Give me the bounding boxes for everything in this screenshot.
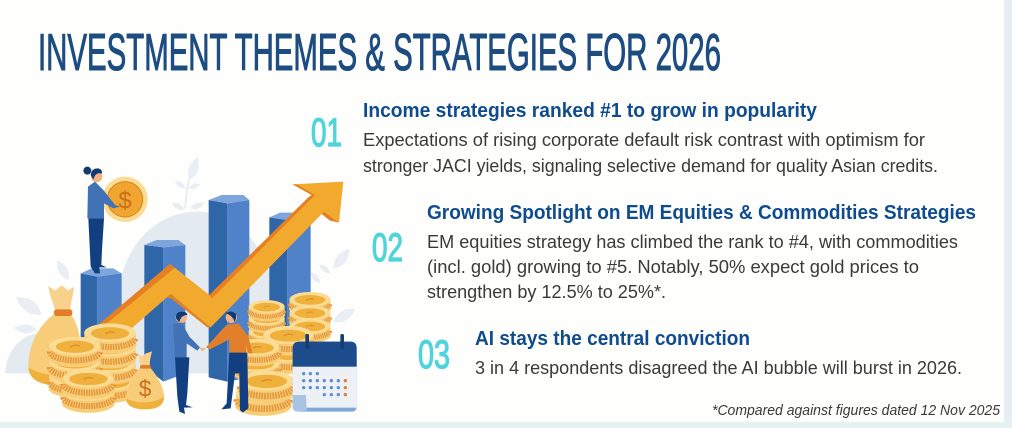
number 03: 03 [418, 333, 450, 377]
body 02 [427, 232, 958, 302]
heading 02: Growing Spotlight on EM Equities & Commodities Strategies [427, 202, 976, 224]
right coin stacks [234, 292, 330, 415]
woman holding coin [83, 167, 148, 273]
body 02: strengthen by 12.5% to 25%*. [427, 282, 666, 302]
body 01 [363, 130, 938, 176]
bar 4 [269, 213, 311, 330]
body 01: Expectations of rising corporate default risk contrast with optimism for [363, 130, 925, 150]
large money bag [28, 285, 80, 385]
rising arrow [99, 182, 343, 328]
body 03: 3 in 4 respondents disagreed the AI bubble will burst in 2026. [475, 358, 962, 378]
body 01: stronger JACI yields, signaling selective demand for quality Asian credits. [363, 156, 938, 176]
calendar [293, 334, 357, 412]
theme 03 [418, 328, 962, 378]
background blobs and leaves [5, 156, 358, 373]
number 02: 02 [372, 226, 403, 270]
number 01: 01 [311, 111, 342, 155]
footnote: *Compared against figures dated 12 Nov 2025 [712, 403, 1001, 419]
left coin stacks [49, 323, 136, 412]
heading 03: AI stays the central conviction [475, 328, 750, 350]
bar 2 [144, 240, 185, 382]
small money bag: $ [139, 376, 152, 402]
bar 1 [81, 268, 122, 340]
woman holding coin: $ [118, 187, 132, 214]
theme 02 [372, 202, 976, 302]
body 02: EM equities strategy has climbed the rank to #4, with commodities [427, 232, 958, 252]
heading 01: Income strategies ranked #1 to grow in popularity [363, 100, 818, 122]
body 02: (incl. gold) growing to #5. Notably, 50% expect gold prices to [427, 257, 919, 277]
illustration: growth chart with coins and people [5, 156, 358, 415]
bar 3 [209, 195, 249, 382]
businessman in blue [173, 312, 206, 414]
theme 01 [311, 100, 938, 176]
small money bag [126, 351, 164, 409]
businessman in orange [206, 311, 253, 413]
